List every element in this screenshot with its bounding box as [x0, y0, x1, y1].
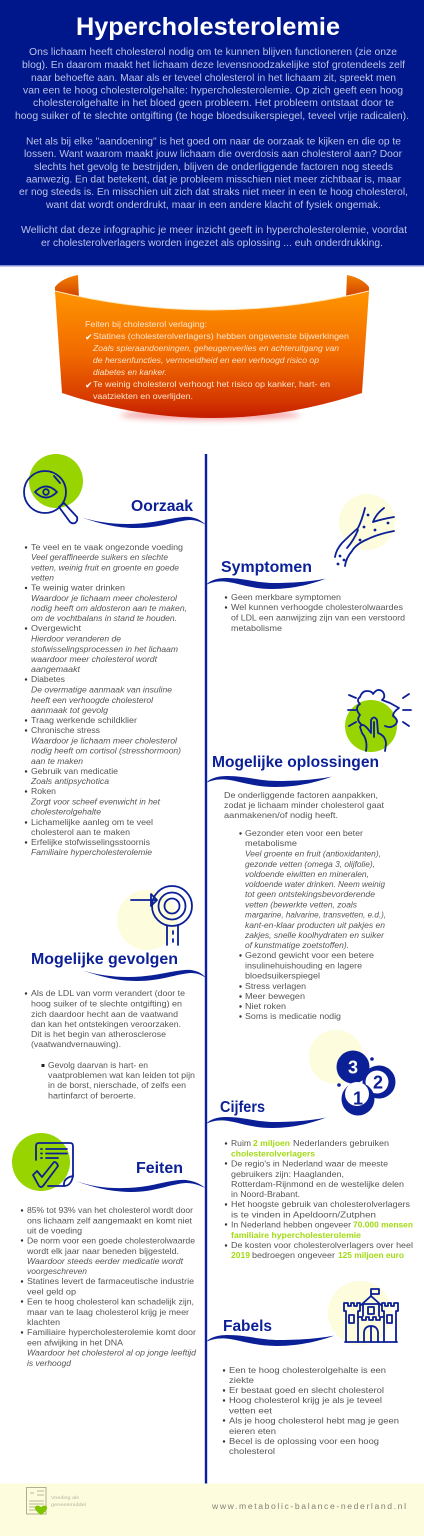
list: causes: cholesterolgehalte — [31, 806, 101, 816]
icon: document with check — [12, 1133, 73, 1191]
list: solutions: of kunstmatige zoetstoffen). — [245, 940, 349, 950]
list: consequences: in de borst, nierschade, of zelfs een — [48, 1080, 186, 1090]
list: causes: vetten, weinig fruit en groente en goede — [31, 562, 179, 572]
list: figures: De regio's in Nederland waar de meeste — [231, 1158, 388, 1168]
list: facts: maar van te laag cholesterol krijg je meer — [27, 1307, 189, 1317]
list: figures: Nederlanders gebruiken — [293, 1138, 389, 1148]
list: causes: Familiaire hypercholesterolemie — [31, 847, 152, 857]
list: facts: klachten — [27, 1317, 60, 1327]
heading: Feiten — [136, 1160, 183, 1177]
list: solutions: vetten (bewerkte vetten, zoals — [245, 900, 358, 910]
wave divider — [83, 970, 206, 981]
list: figures: 2019 — [231, 1250, 250, 1260]
list: figures: 125 miljoen euro — [338, 1250, 404, 1260]
list: causes — [25, 542, 187, 857]
list: figures: cholesterolverlagers — [231, 1148, 315, 1158]
list: figures: 2 miljoen — [253, 1138, 290, 1148]
list: figures: 70.000 mensen — [353, 1220, 413, 1230]
list: causes: aan te maken — [31, 756, 83, 766]
panel: footer — [0, 1484, 424, 1536]
list: consequences — [25, 988, 195, 1100]
list: causes: Overgewicht — [31, 623, 82, 633]
list: figures: bedroegen ongeveer — [252, 1250, 335, 1260]
list: figures: Het hoogste gebruik van cholesterolverlagers — [231, 1199, 411, 1209]
wave divider — [206, 1335, 334, 1346]
intro text block: Net als bij elke "aandoening" is het goed om naar de oorzaak te kijken en die op te — [26, 136, 401, 148]
list: myths: Een te hoog cholesterolgehalte is een — [229, 1365, 386, 1375]
heading: Oorzaak — [131, 498, 193, 515]
list: causes: Gebruik van medicatie — [31, 766, 118, 776]
ribbon text: de hersenfuncties, vermoeidheid en een verhoogd risico op — [93, 355, 319, 365]
panel: Oorzaak — [24, 454, 206, 857]
logo text: geneesmiddel — [51, 1502, 86, 1508]
list: consequences: dan kan het ontstekingen veroorzaken. — [31, 1019, 181, 1029]
icon: magnifier with eye — [24, 454, 83, 523]
list: symptoms: Wel kunnen verhoogde cholesterolwaardes — [231, 602, 404, 612]
panel: Cijfers — [206, 1030, 413, 1260]
intro text block: Ons lichaam heeft cholesterol nodig om te kunnen blijven functioneren (zie onze — [29, 47, 397, 58]
list: causes: Hierdoor veranderen de — [31, 634, 121, 644]
list: solutions: Soms is medicatie nodig — [245, 1011, 341, 1021]
list: solutions: bloedsuikerspiegel — [245, 970, 320, 980]
icon: castle — [328, 1281, 398, 1345]
list: facts: voorgeschreven — [27, 1266, 87, 1276]
list: causes: vetten — [31, 572, 54, 582]
list: solutions: voldoende eiwitten en mineralen, — [245, 869, 369, 879]
list: facts: wordt elk jaar naar beneden bijgesteld. — [26, 1246, 179, 1256]
list: solutions: Gezonder eten voor een beter — [245, 828, 363, 838]
wave divider — [76, 1180, 205, 1192]
list: solutions: tot geen ontstekingsbevorderende — [245, 889, 375, 899]
icon: numbered circles: 2 — [373, 1072, 383, 1092]
intro text block: lossen. Want waarom maakt jouw lichaam die overdosis aan cholesterol aan? Door — [24, 149, 403, 160]
list: figures: Ruim — [231, 1138, 251, 1148]
list: consequences: hoog suiker of te slechte ontgifting) en — [31, 998, 182, 1008]
intro text block: er nog steeds is. En misschien uit zich dat straks niet meer in een te hoog cholesterol, — [19, 187, 408, 198]
list: causes: De overmatige aanmaak van insuline — [31, 684, 172, 694]
intro text block: slechts het gevolg te bestrijden, blijven de onderliggende factoren nog steeds — [34, 162, 393, 173]
list: solutions — [224, 790, 386, 1021]
ribbon text — [85, 319, 349, 401]
list: causes: aanmaak tot gevolg — [31, 705, 108, 715]
list: facts: Een te hoog cholesterol kan schadelijk zijn, — [27, 1296, 194, 1306]
icon: hand with puzzle piece — [345, 690, 411, 752]
list: myths: ziekte — [229, 1375, 254, 1385]
list: causes: nodig heeft om aldosteron aan te maken, — [31, 603, 187, 613]
list: causes: Zorgt voor scheef evenwicht in het — [30, 796, 161, 806]
title: Hypercholesterolemie — [76, 13, 340, 41]
list: causes: Diabetes — [31, 674, 66, 684]
list: solutions: Meer bewegen — [245, 991, 305, 1001]
icon: blood vessels — [335, 494, 395, 566]
heading: Fabels — [223, 1318, 272, 1335]
ribbon text: Zoals spieraandoeningen, geheugenverlies en achteruitgang van — [92, 343, 339, 353]
list: symptoms: of LDL een aanwijzing zijn van een verstoord — [231, 612, 405, 622]
list: causes: cholesterol aan te maken — [31, 827, 130, 837]
intro text block: cholesterolgehalte in het bloed geen probleem. Het probleem ontstaat door te — [33, 98, 394, 109]
panel: Mogelijke oplossingen — [206, 690, 411, 1021]
list: causes: nodig heeft om cortisol (stresshormoon) — [31, 746, 181, 756]
ribbon text: Te weinig cholesterol verhoogt het risico op kanker, hart- en — [93, 379, 330, 389]
list: facts: een afwijking in het DNA — [27, 1338, 123, 1348]
list: facts: 85% tot 93% van het cholesterol wordt door — [27, 1205, 193, 1215]
icon: numbered circles: 1 — [353, 1088, 363, 1108]
list: causes: Waardoor je lichaam meer cholesterol — [31, 593, 178, 603]
list: figures: Rotterdam-Rijnmond en de westelijke delen — [231, 1179, 404, 1189]
list: figures: gebruikers zijn: Haaglanden, — [231, 1169, 344, 1179]
heading: Cijfers — [220, 1099, 265, 1116]
list: symptoms: Geen merkbare symptomen — [231, 592, 341, 602]
list: causes: Zoals antipsychotica — [30, 776, 109, 786]
list: consequences: Dit is het begin van atherosclerose — [31, 1029, 166, 1039]
panel: Fabels — [206, 1281, 399, 1456]
wave divider — [206, 776, 332, 787]
list: causes: aangemaakt — [31, 664, 81, 674]
list: solutions: zodat je lichaam minder cholesterol gaat — [224, 800, 385, 810]
list: myths: Becel is de oplossing voor een hoog — [229, 1436, 379, 1446]
list: facts: ons lichaam zelf aangemaakt en komt niet — [27, 1216, 193, 1226]
list: myths: vetten eet — [229, 1406, 273, 1416]
panel: Mogelijke gevolgen — [25, 886, 206, 1100]
list: solutions: Gezond gewicht voor een betere — [245, 950, 374, 960]
list: solutions: margarine, halvarine, transvetten, e.d.), — [245, 910, 386, 920]
intro text block — [15, 47, 409, 249]
list: causes: Chronische stress — [31, 725, 101, 735]
list: myths: eieren eten — [229, 1426, 276, 1436]
heading: Mogelijke gevolgen — [31, 951, 178, 968]
list: causes: heeft een verhoogde cholesterol — [31, 695, 154, 705]
list: causes: Waardoor je lichaam meer cholesterol — [31, 736, 178, 746]
intro text block: van een te hoog cholesterolgehalte: hypercholesterolemie. Op zich geeft een hoog — [23, 86, 403, 96]
list: facts: Statines levert de farmaceutische industrie — [27, 1276, 194, 1286]
icon: note with heart — [26, 1488, 47, 1515]
list: facts — [21, 1205, 197, 1368]
list: consequences: Gevolg daarvan is hart- en — [48, 1060, 148, 1070]
list: myths — [223, 1365, 399, 1456]
wave divider — [206, 1117, 326, 1128]
wave divider — [206, 578, 326, 589]
intro text block: Wellicht dat deze infographic je meer inzicht geeft in hypercholesterolemie, voordat — [21, 225, 407, 236]
logo text: Voeding als — [51, 1495, 80, 1501]
icon: numbered circles: 3 — [348, 1058, 358, 1078]
list: consequences: vaatproblemen wat kan leiden tot pijn — [48, 1070, 195, 1080]
list: figures: De kosten voor cholesterolverlagers over heel — [231, 1240, 413, 1250]
ribbon text: ✔ — [85, 333, 93, 343]
list: myths: Als je hoog cholesterol hebt mag je geen — [229, 1416, 399, 1426]
list: facts: uit de voeding — [27, 1226, 82, 1236]
list: causes: Traag werkende schildklier — [31, 715, 137, 725]
intro text block: blog). En daarom maakt het lichaam deze levensnoodzakelijke stof grotendeels zelf — [22, 60, 405, 71]
list: solutions: voldoende water drinken. Neem weinig — [245, 879, 385, 889]
list: causes: waardoor meer cholesterol wordt — [31, 654, 158, 664]
panel: Symptomen — [206, 494, 405, 633]
list: facts: Familiaire hypercholesterolemie komt door — [27, 1327, 196, 1337]
list: consequences: (vaatwandvernauwing). — [31, 1039, 121, 1049]
list: causes: Te veel en te vaak ongezonde voeding — [31, 542, 183, 552]
list: solutions: zakjes, snelle koolhydraten en suiker — [244, 930, 385, 940]
list: solutions: Niet roken — [245, 1001, 286, 1011]
list: causes: Veel geraffineerde suikers en slechte — [31, 552, 168, 562]
list: consequences: Als de LDL van vorm verandert (door te — [31, 988, 185, 998]
list: symptoms: metabolisme — [231, 623, 282, 633]
list: causes: Te weinig water drinken — [31, 582, 125, 592]
ribbon text: ✔ — [85, 381, 93, 391]
list: causes: om de vochtbalans in stand te houden. — [31, 613, 177, 623]
intro text block: aanwezig. En dat betekent, dat je probleem misschien niet meer zichtbaar is, maar — [26, 174, 402, 186]
website url: www.metabolic-balance-nederland.nl — [211, 1501, 406, 1511]
list: solutions: De onderliggende factoren aanpakken, — [224, 790, 378, 800]
list: figures: is te vinden in Apeldoorn/Zutphen — [231, 1210, 376, 1220]
list: causes: stofwisselingsprocessen in het lichaam — [31, 644, 178, 654]
timeline axis — [205, 454, 207, 1484]
list: myths: Er bestaat goed en slecht cholesterol — [229, 1385, 384, 1395]
list: figures: in Noord-Brabant. — [231, 1189, 300, 1199]
list: facts: veel geld op — [27, 1286, 76, 1296]
list: solutions: aanmakenen/of nodig heeft. — [224, 810, 338, 820]
heading: Symptomen — [221, 559, 312, 576]
intro text block: er cholesterolverlagers worden ingezet als oplossing ... euh onderdrukking. — [41, 238, 383, 249]
intro text block: want dat wordt onderdrukt, maar in een andere klacht of fysiek ongemak. — [45, 200, 381, 211]
intro text block: naar behoefte aan. Maar als er teveel cholesterol in het lichaam zit, spreekt men — [31, 73, 396, 84]
list: consequences: hartinfarct of beroerte. — [48, 1090, 136, 1100]
list: causes: Erfelijke stofwisselingsstoornis — [31, 837, 151, 847]
list: causes: Lichamelijke aanleg om te veel — [31, 817, 153, 827]
icon: numbered circles — [309, 1030, 396, 1116]
intro text block: hoog suiker of te slechte ontgifting (te hoge bloedsuikerspiegel, teveel vrije radicalen). — [15, 111, 409, 122]
ribbon text: Statines (cholesterolverlagers) hebben ongewenste bijwerkingen — [93, 331, 349, 341]
list: solutions: insulinehuishouding en lagere — [245, 960, 362, 970]
list: myths: cholesterol — [229, 1446, 275, 1456]
list: solutions: Veel groente en fruit (antioxidanten), — [245, 848, 381, 858]
heading: Mogelijke oplossingen — [212, 754, 379, 771]
list: solutions: Stress verlagen — [245, 981, 306, 991]
icon: target with arrow — [117, 886, 192, 950]
ribbon text: vaatziekten en overlijden. — [93, 391, 193, 401]
list: myths: Hoog cholesterol krijg je als je teveel — [229, 1395, 382, 1405]
panel: header — [0, 0, 424, 266]
list: figures — [225, 1138, 413, 1260]
ribbon text: diabetes en kanker. — [93, 367, 167, 377]
list: facts: Waardoor het cholesterol al op jonge leeftijd — [27, 1348, 197, 1358]
ribbon text: Feiten bij cholesterol verlaging: — [85, 319, 207, 329]
list: causes: Roken — [31, 786, 56, 796]
panel: orange ribbon with facts — [55, 275, 369, 420]
list: consequences: zich daardoor hecht aan de vaatwand — [31, 1009, 178, 1019]
list: facts: is verhoogd — [27, 1358, 72, 1368]
list: solutions: gezonde vetten (omega 3, olijfolie), — [245, 859, 375, 869]
list: solutions: kant-en-klaar producten uit pakjes en — [245, 920, 385, 930]
list: figures: familiaire hypercholesterolemie — [231, 1230, 361, 1240]
wave divider — [82, 517, 206, 528]
list: symptoms — [225, 592, 405, 633]
list: facts: Waardoor steeds eerder medicatie wordt — [27, 1256, 184, 1266]
list: figures: In Nederland hebben ongeveer — [231, 1220, 351, 1230]
panel: Feiten — [12, 1133, 205, 1368]
logo text — [51, 1495, 86, 1508]
list: facts: De norm voor een goede cholesterolwaarde — [27, 1236, 195, 1246]
list: solutions: metabolisme — [245, 838, 297, 848]
